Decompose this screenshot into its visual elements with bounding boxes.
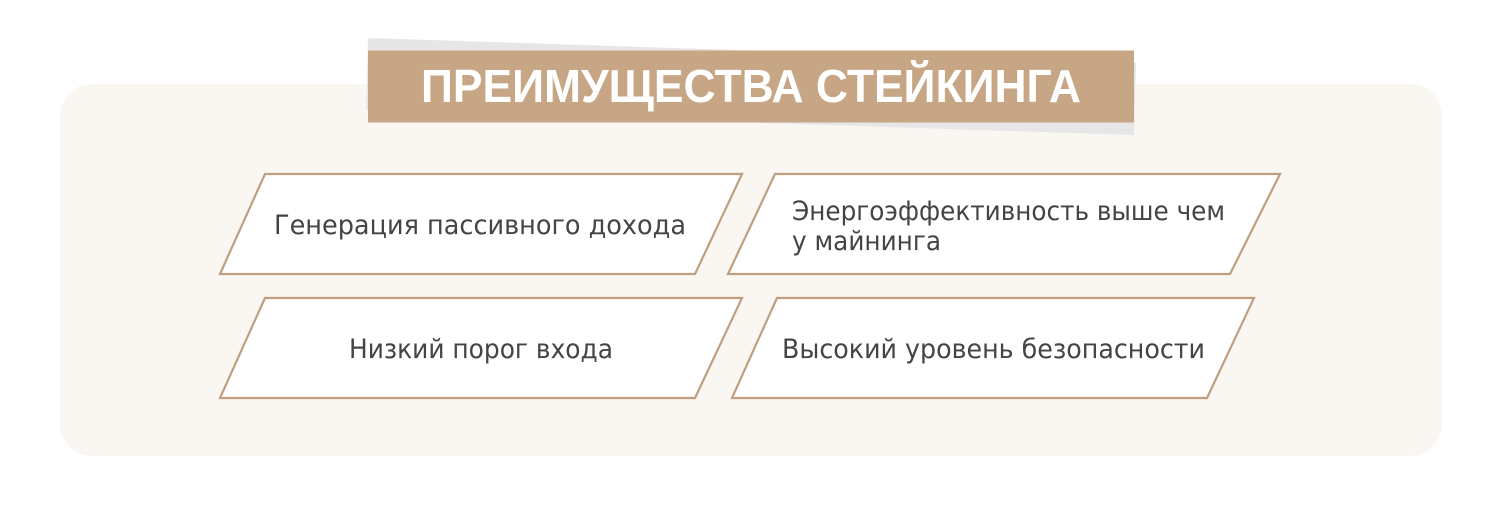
card: energy efficiency: у майнинга [792,226,941,257]
card: passive income: Генерация пассивного дохода [274,210,686,241]
panel: background [60,84,1442,456]
card: energy efficiency [728,174,1280,274]
card: high security [732,298,1254,398]
card: low entry threshold [220,298,742,398]
card: passive income [220,174,742,274]
banner shadow [366,38,1136,135]
heading: title banner [366,38,1136,135]
card: high security: Высокий уровень безопасности [782,334,1205,365]
card: energy efficiency: Энергоэффективность выше чем [792,196,1225,227]
card: low entry threshold: Низкий порог входа [349,334,613,365]
banner bar [368,50,1134,122]
title: ПРЕИМУЩЕСТВА СТЕЙКИНГА [421,60,1081,112]
